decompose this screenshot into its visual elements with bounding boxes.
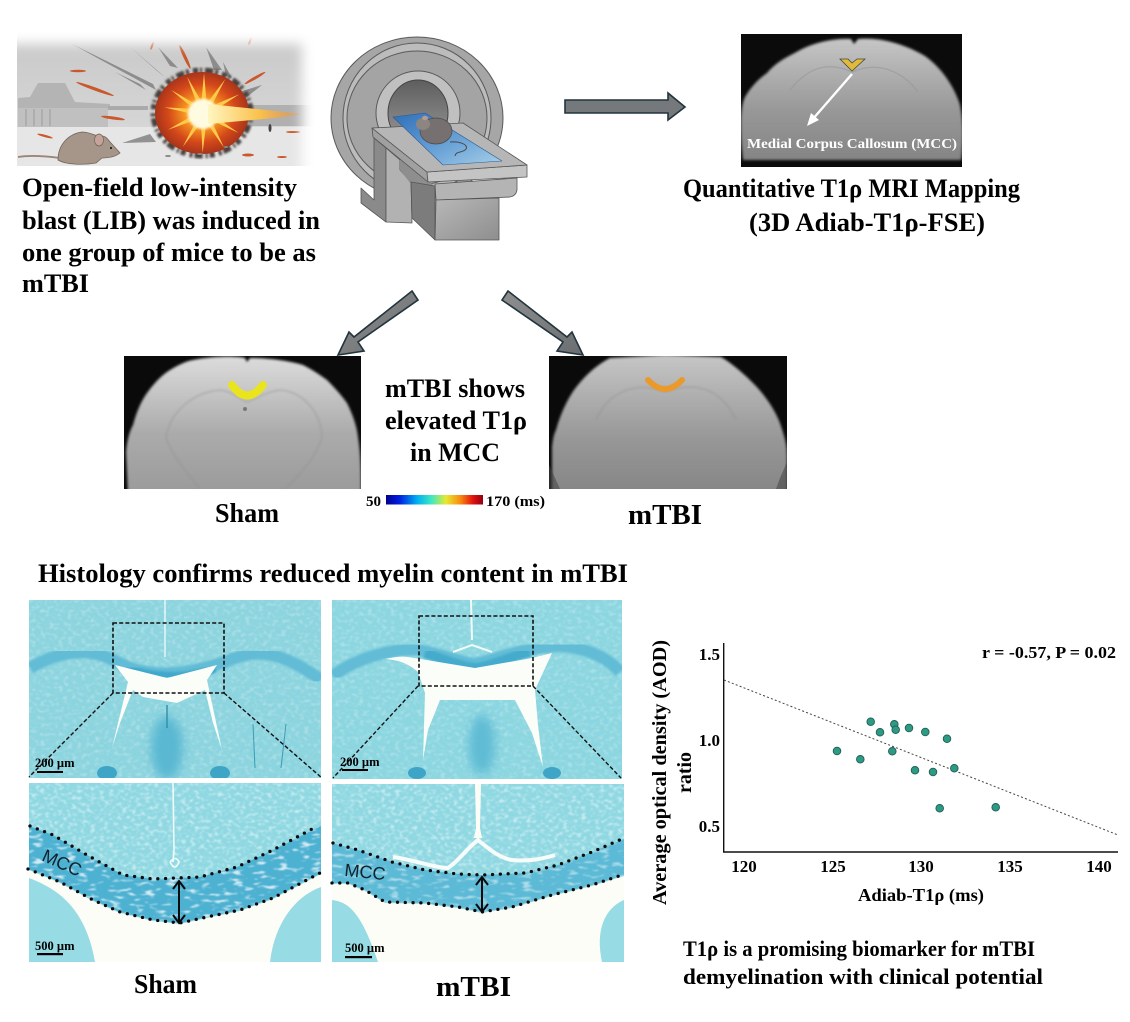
nuclei blobs xyxy=(97,766,230,780)
neuron dots xyxy=(332,665,622,779)
MRI background xyxy=(741,34,962,167)
panel: blast illustration xyxy=(17,30,317,167)
mTBI MCC boundary dots xyxy=(332,839,622,912)
panel: MRI with MCC xyxy=(741,34,963,167)
chart: AOD vs T1rho scatter xyxy=(650,640,1118,906)
sham zoom box and guide lines xyxy=(29,623,322,778)
MRI background xyxy=(124,356,361,489)
text: blast caption: mTBI xyxy=(22,269,89,298)
white arrow xyxy=(807,74,852,126)
arrow: to mTBI xyxy=(502,291,583,355)
fireball core xyxy=(188,99,218,129)
MCC band speckle xyxy=(332,835,624,915)
mouse on pad xyxy=(416,116,467,156)
MCC sham overlay xyxy=(232,385,263,396)
brain xyxy=(741,39,963,160)
corpus callosum band xyxy=(333,646,620,676)
x tick labels: 140 xyxy=(1086,857,1112,876)
scanner outer ring xyxy=(331,37,503,199)
lateral dark corner left xyxy=(549,465,560,489)
text: MRI mapping caption: (3D Adiab-T1ρ-FSE) xyxy=(749,208,985,237)
panel: mTBI histology zoom xyxy=(332,784,624,962)
x tick labels: 120 xyxy=(731,857,757,876)
scale bar: 200 um mTBI: 200 µm xyxy=(340,755,380,769)
brain arc lines xyxy=(790,67,918,92)
right lobe xyxy=(270,887,321,962)
x tick labels: 135 xyxy=(997,857,1023,876)
midline crack xyxy=(164,600,166,657)
debris xyxy=(165,124,272,157)
arrow: to T1rho map xyxy=(565,93,685,120)
column dark face xyxy=(361,138,386,222)
scanner bore xyxy=(388,80,448,146)
midline crack xyxy=(453,600,492,652)
panel: sham T1rho map xyxy=(124,356,361,495)
text: elevated T1rho finding: mTBI shows xyxy=(385,374,525,403)
panel: mTBI T1rho map xyxy=(549,355,787,495)
mTBI zoom box and guide lines xyxy=(333,616,621,778)
x axis title: Adiab-T1ρ (ms) xyxy=(858,885,984,906)
neuron dots xyxy=(29,665,321,778)
sham MCC boundary dots xyxy=(28,826,320,923)
y tick labels: 0.5 xyxy=(699,817,720,836)
text: conclusion: T1ρ is a promising biomarker for mTBI xyxy=(683,936,1035,961)
y axis title second line: ratio xyxy=(675,752,696,793)
fireball rays xyxy=(164,73,241,153)
table top xyxy=(372,123,527,172)
central midline blue xyxy=(469,715,495,775)
table underside xyxy=(400,158,434,186)
data points xyxy=(833,718,1000,812)
MCC band xyxy=(332,839,624,912)
text: MRI mapping caption: Quantitative T1ρ MRI Mapping xyxy=(683,174,1020,203)
smoke streaks xyxy=(70,43,262,143)
table front edge xyxy=(427,165,527,182)
pedestal top band xyxy=(435,178,517,200)
midline dot xyxy=(243,407,247,411)
nuclei blobs xyxy=(408,767,561,779)
heading: histology: Histology confirms reduced myelin content in mTBI xyxy=(38,559,628,588)
sparks xyxy=(37,37,300,158)
MRI background xyxy=(549,356,787,489)
label: MCC mTBI: MCC xyxy=(344,860,386,884)
scale bar: 500 um sham: 500 µm xyxy=(35,939,75,953)
text: blast caption: blast (LIB) was induced in xyxy=(22,206,321,235)
midline crack xyxy=(474,784,482,838)
y tick labels xyxy=(699,645,720,836)
y tick labels: 1.5 xyxy=(699,645,720,664)
tissue speckle xyxy=(332,600,622,779)
text: blast caption: one group of mice to be as xyxy=(22,238,316,267)
white ventricles xyxy=(112,665,222,750)
tissue background xyxy=(29,783,321,962)
left lobe xyxy=(332,900,378,962)
colour scale: 50 xyxy=(366,494,381,510)
MCC band speckle xyxy=(29,820,321,928)
text: elevated T1rho finding: in MCC xyxy=(410,438,500,467)
buildings xyxy=(18,83,315,127)
column light face xyxy=(386,148,412,223)
y axis title: Average optical density (AOD) xyxy=(650,640,671,905)
pedestal side xyxy=(411,182,435,240)
axes xyxy=(724,643,1118,852)
MCC label: Medial Corpus Callosum (MCC) xyxy=(747,137,957,152)
text: conclusion: demyelination with clinical potential xyxy=(683,964,1043,989)
corpus callosum band xyxy=(30,652,321,680)
y tick labels: 1.0 xyxy=(699,731,720,750)
sham thickness arrow xyxy=(173,881,185,923)
mTBI thickness arrow xyxy=(476,877,488,912)
scale bar: 200 um sham: 200 µm xyxy=(35,756,75,770)
icon: MRI scanner with mouse xyxy=(331,37,527,240)
correlation stat: r = -0.57, P = 0.02 xyxy=(982,643,1116,662)
mouse near blast xyxy=(18,132,120,164)
midline crack xyxy=(170,783,179,867)
white below band xyxy=(29,870,321,962)
x tick labels: 125 xyxy=(820,857,846,876)
panel: mTBI histology overview xyxy=(332,600,622,779)
colour scale: 170 (ms) xyxy=(486,494,545,510)
tissue speckle xyxy=(29,783,321,962)
MCC chevron xyxy=(840,59,865,71)
text: conclusion xyxy=(683,936,1043,989)
tissue background xyxy=(29,600,321,778)
arrow: to sham xyxy=(338,291,418,355)
text: elevated T1rho finding: elevated T1ρ xyxy=(385,406,527,435)
text: elevated T1rho finding xyxy=(385,374,527,467)
panel: sham histology overview xyxy=(29,600,321,780)
x tick labels xyxy=(731,857,1112,876)
scale bar: 500 um mTBI: 500 µm xyxy=(345,941,385,955)
pedestal lower face xyxy=(435,198,499,240)
brain structure lines xyxy=(624,386,710,392)
white fissure wings xyxy=(393,840,555,868)
x tick labels: 130 xyxy=(908,857,934,876)
lateral dark corner right xyxy=(776,462,787,489)
text: MRI mapping caption xyxy=(683,174,1020,237)
vessel lines xyxy=(253,724,286,768)
MCC band xyxy=(28,826,321,923)
tissue speckle xyxy=(332,784,624,962)
brain xyxy=(126,357,361,495)
midline dark line xyxy=(166,705,168,728)
table left edge xyxy=(372,128,428,182)
blast background xyxy=(17,38,308,127)
tissue background xyxy=(332,784,624,962)
label: sham MRI: Sham xyxy=(215,498,279,528)
blue pad xyxy=(393,113,502,165)
tissue background xyxy=(332,600,622,779)
label: MCC sham: MCC xyxy=(39,846,85,880)
tissue speckle xyxy=(29,600,321,778)
colour scale xyxy=(366,494,545,510)
scanner hub xyxy=(376,71,460,155)
MCC mTBI overlay xyxy=(648,380,682,389)
left lobe xyxy=(29,878,95,962)
brain structure lines xyxy=(173,389,318,420)
label: mTBI MRI: mTBI xyxy=(628,499,702,531)
ground xyxy=(17,127,317,167)
blast jet xyxy=(208,104,303,124)
brain xyxy=(552,355,787,495)
text: blast caption: Open-field low-intensity xyxy=(22,173,297,202)
fireball smoke fringe xyxy=(154,71,250,155)
label: mTBI histology: mTBI xyxy=(436,971,511,1003)
text: blast caption xyxy=(22,173,321,298)
central darker band xyxy=(125,668,215,676)
trend line xyxy=(724,680,1118,835)
white below band xyxy=(332,876,624,962)
white ventricle xyxy=(385,653,552,767)
panel: sham histology zoom xyxy=(28,783,321,962)
label: sham histology: Sham xyxy=(134,969,197,999)
right lobe xyxy=(600,900,624,962)
central midline blue xyxy=(151,716,183,780)
central darker band xyxy=(425,652,530,668)
fireball xyxy=(155,72,249,154)
